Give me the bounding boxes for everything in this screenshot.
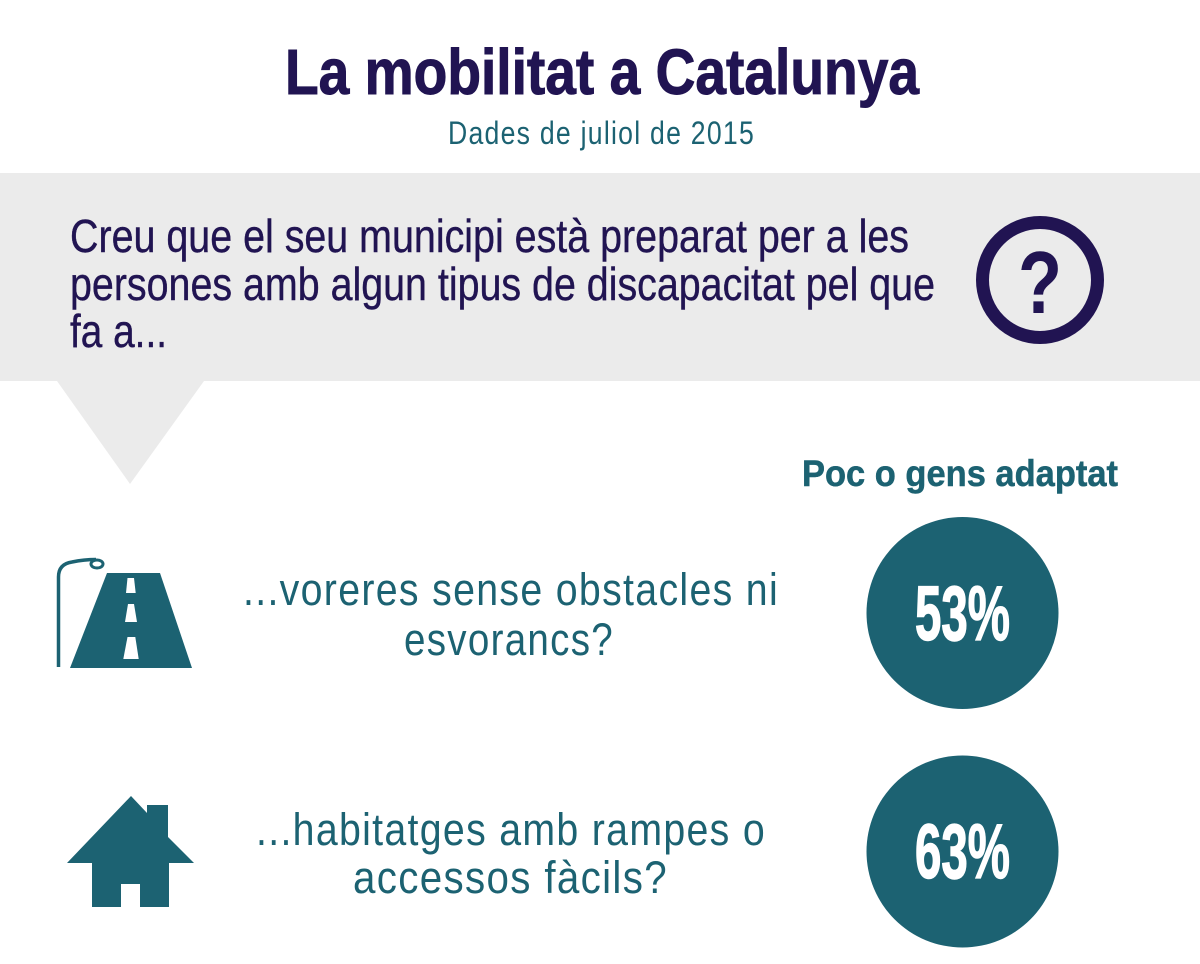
stat circle: 53% bbox=[866, 517, 1058, 709]
title: La mobilitat a Catalunya bbox=[285, 36, 919, 108]
stat circle: 63% bbox=[866, 756, 1058, 948]
question text: persones amb algun tipus de discapacitat pel que bbox=[70, 258, 935, 310]
column heading: Poc o gens adaptat bbox=[802, 453, 1118, 494]
question text: Creu que el seu municipi està preparat per a les bbox=[70, 210, 909, 262]
row 2 text: accessos fàcils? bbox=[353, 852, 668, 903]
stat circle: 63%: 63% bbox=[915, 809, 1010, 895]
icon: question mark: ? bbox=[1018, 233, 1062, 332]
subtitle: Dades de juliol de 2015 bbox=[448, 115, 755, 151]
stat circle: 53%: 53% bbox=[915, 571, 1010, 657]
row 1 text: esvorancs? bbox=[404, 614, 614, 665]
row 2 text: ...habitatges amb rampes o bbox=[256, 804, 766, 855]
row 1 text: ...voreres sense obstacles ni bbox=[243, 564, 779, 615]
question text: fa a... bbox=[70, 305, 167, 357]
row 1 text bbox=[243, 564, 779, 665]
icon: road with street lamp bbox=[58, 560, 192, 668]
icon: question mark bbox=[982, 222, 1098, 338]
panel: question banner bbox=[0, 173, 1200, 484]
row 2 text bbox=[256, 804, 766, 903]
icon: house bbox=[67, 796, 194, 907]
question text bbox=[70, 210, 935, 357]
